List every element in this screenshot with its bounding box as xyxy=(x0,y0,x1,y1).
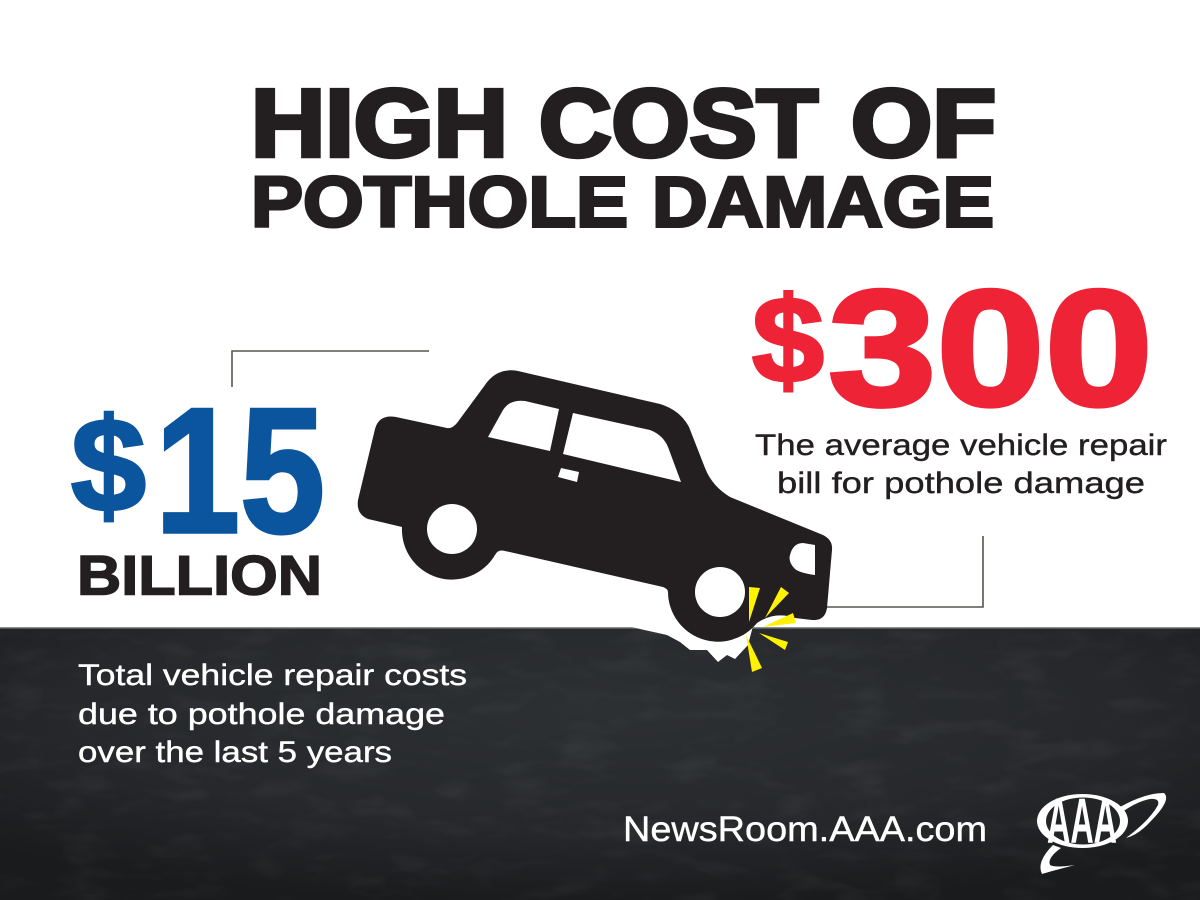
callout bracket: left xyxy=(232,351,429,387)
stat: $300: 300 xyxy=(828,256,1153,440)
website link: NewsRoom.AAA.com xyxy=(623,810,987,849)
pothole: torn road edge xyxy=(628,626,753,662)
callout bracket: right xyxy=(826,536,983,607)
icon: car tilted into pothole xyxy=(358,370,832,642)
description: total repair costs: Total vehicle repair costs xyxy=(78,659,467,692)
stat: $15 billion: 15 xyxy=(155,371,325,570)
stat: $15 billion xyxy=(71,371,325,606)
description: total repair costs xyxy=(78,659,467,769)
stat: $15 billion: BILLION xyxy=(77,544,322,606)
stat: $300: $ xyxy=(752,272,824,408)
stat: $300 xyxy=(752,256,1153,440)
background: asphalt road xyxy=(0,627,1200,900)
description: average repair bill: The average vehicle repair xyxy=(755,429,1167,462)
description: average repair bill: bill for pothole damage xyxy=(777,467,1145,500)
stat: $15 billion: $ xyxy=(71,392,146,540)
title: HIGH xyxy=(251,70,508,177)
title: OF xyxy=(851,70,996,177)
title: POTHOLE xyxy=(251,164,628,242)
title xyxy=(251,70,996,242)
title: DAMAGE xyxy=(652,164,994,242)
logo: AAA: AAA xyxy=(1047,785,1117,857)
description: total repair costs: due to pothole damage xyxy=(78,698,445,731)
logo: AAA xyxy=(1037,785,1166,874)
description: average repair bill xyxy=(755,429,1167,500)
title: COST xyxy=(539,70,818,177)
icon: impact sparks xyxy=(746,587,796,672)
description: total repair costs: over the last 5 years xyxy=(78,736,392,769)
